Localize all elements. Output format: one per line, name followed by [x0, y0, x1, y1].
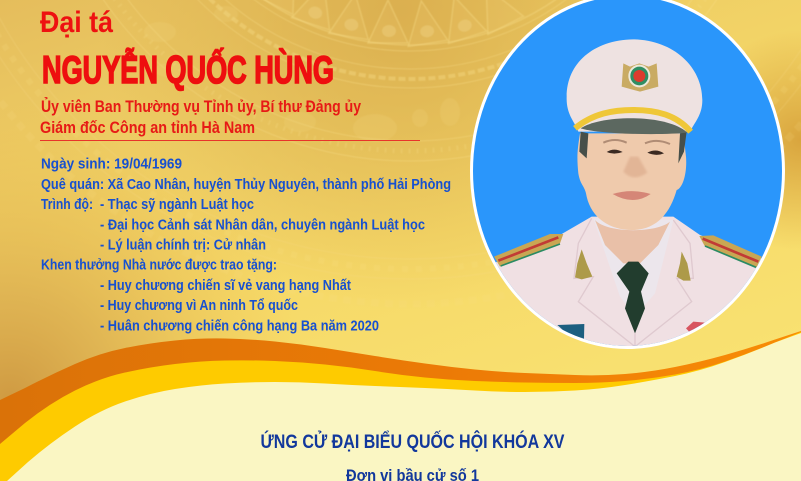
blue oval backdrop — [473, 0, 782, 346]
cap gold cord — [575, 110, 691, 132]
wave: cream lower panel — [7, 333, 801, 481]
rank: Đại tá — [40, 6, 113, 39]
position line 1: Ủy viên Ban Thường vụ Tỉnh ủy, Bí thư Đảng ủy — [41, 97, 362, 116]
wave: orange band — [0, 331, 801, 481]
eyes — [607, 150, 664, 155]
name: NGUYỄN QUỐC HÙNG — [42, 47, 334, 92]
award 1: - Huy chương chiến sĩ vẻ vang hạng Nhất — [100, 278, 351, 294]
biography text — [41, 156, 451, 334]
position line 2: Giám đốc Công an tỉnh Hà Nam — [40, 119, 255, 137]
birth date: Ngày sinh: 19/04/1969 — [41, 156, 182, 172]
shoulder boards — [494, 234, 762, 267]
candidacy heading: ỨNG CỬ ĐẠI BIỂU QUỐC HỘI KHÓA XV — [260, 431, 565, 453]
award 2: - Huy chương vì An ninh Tổ quốc — [100, 298, 298, 314]
necktie — [617, 262, 649, 333]
heading block — [40, 6, 420, 141]
uniform jacket — [496, 216, 762, 346]
cap visor — [581, 118, 687, 134]
name tag and ribbons — [557, 324, 584, 339]
white oval frame — [470, 0, 785, 349]
portrait — [470, 0, 785, 363]
neck and shirt — [594, 218, 673, 305]
bronze drum pattern — [0, 0, 801, 304]
nose and mouth — [623, 157, 647, 177]
education item 1: - Thạc sỹ ngành Luật học — [100, 197, 254, 213]
officer photo illustration — [493, 39, 762, 363]
wave: yellow band — [0, 332, 801, 481]
face — [577, 133, 686, 230]
cap badge — [622, 63, 658, 92]
awards label: Khen thưởng Nhà nước được trao tặng: — [41, 258, 277, 274]
cap crown — [567, 39, 702, 132]
heading rule — [40, 140, 420, 141]
award 3: - Huân chương chiến công hạng Ba năm 2020 — [100, 318, 379, 334]
education label: Trình độ: — [41, 197, 93, 213]
hometown: Quê quán: Xã Cao Nhân, huyện Thủy Nguyên, thành phố Hải Phòng — [41, 177, 451, 193]
collar insignia — [575, 249, 691, 281]
lapel shading — [574, 218, 693, 347]
education item 3: - Lý luận chính trị: Cử nhân — [100, 238, 266, 254]
education item 2: - Đại học Cảnh sát Nhân dân, chuyên ngành Luật học — [100, 217, 425, 233]
